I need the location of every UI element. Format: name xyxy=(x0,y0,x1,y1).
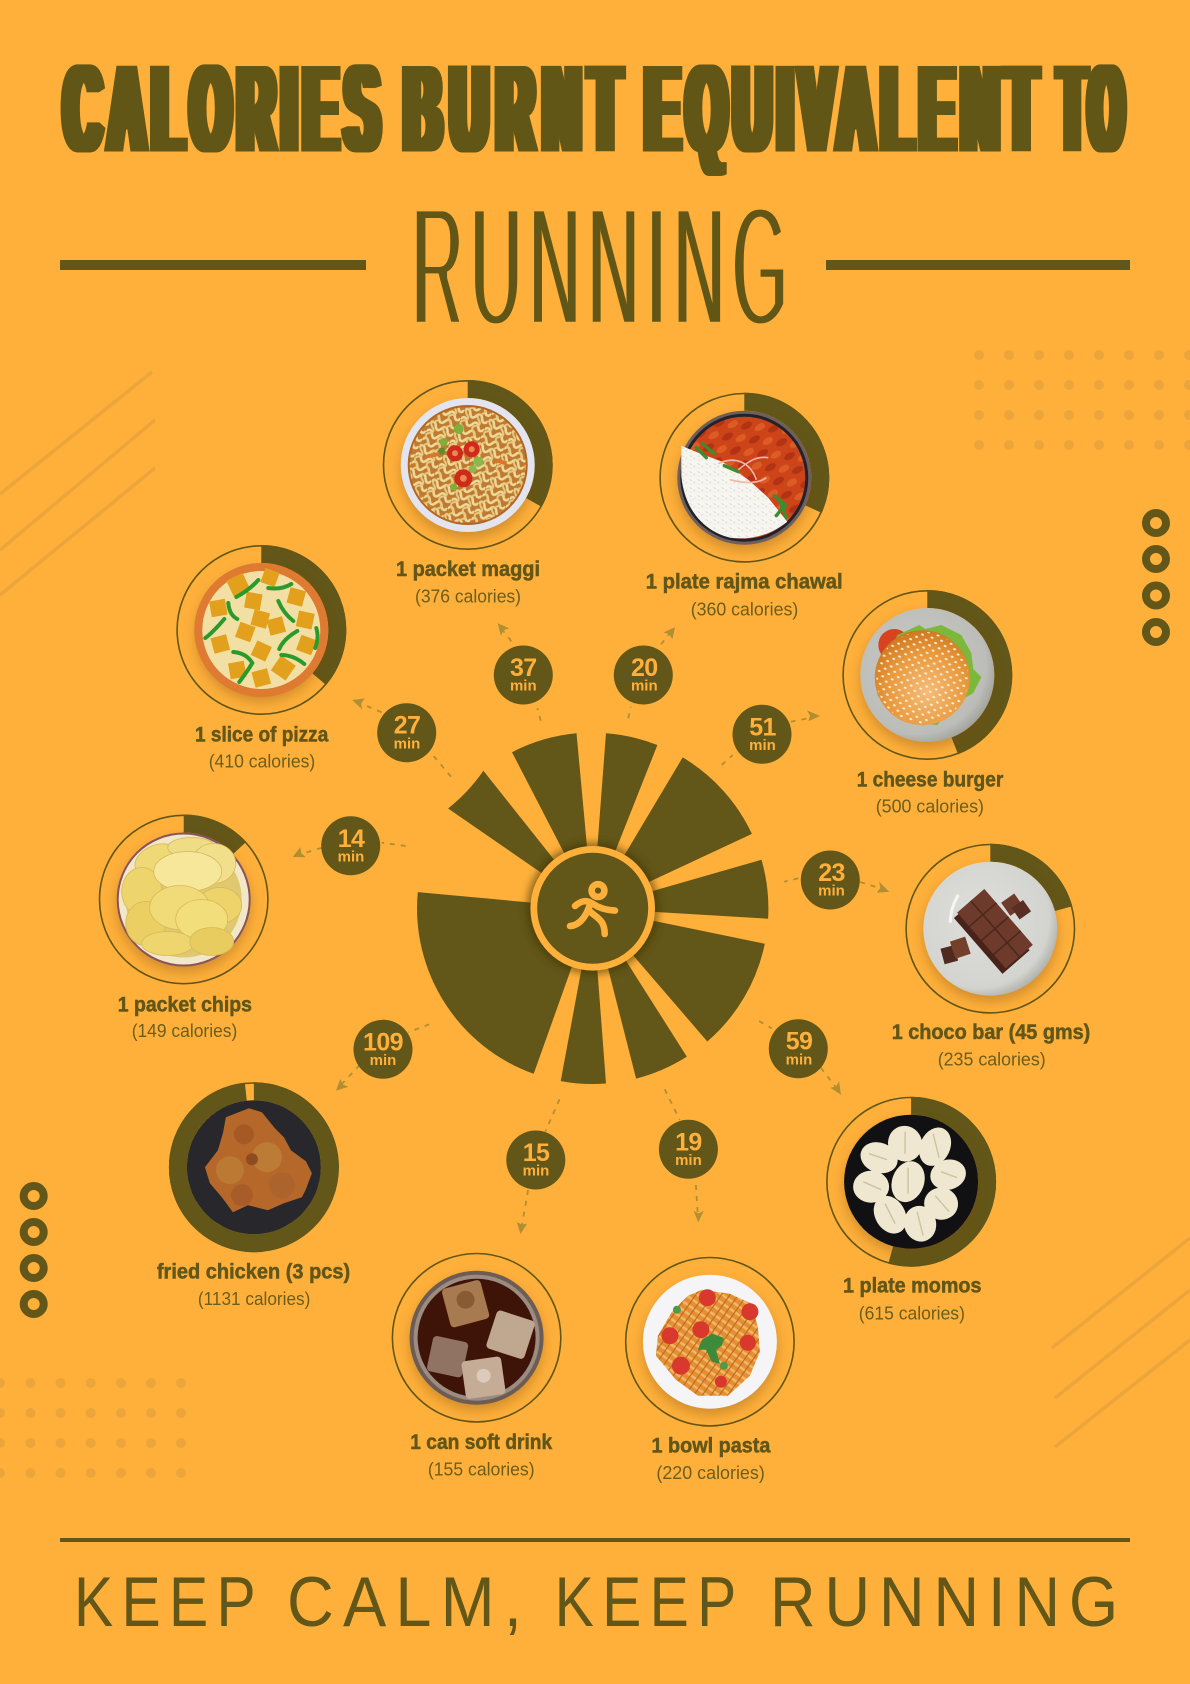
badge: 51 min: min xyxy=(749,737,776,754)
progress ring: rajma chawal xyxy=(660,394,828,562)
badge: 19 min: 19 xyxy=(675,1128,702,1156)
chart sectors xyxy=(417,733,768,1084)
background decorations xyxy=(0,350,1190,1478)
badge: 14 min xyxy=(321,816,380,875)
progress ring: pizza xyxy=(177,546,346,714)
badge: 37 min: 37 xyxy=(510,654,537,682)
image: bowl of chips xyxy=(117,832,251,972)
badge: 109 min: 109 xyxy=(363,1028,403,1056)
progress ring: maggi xyxy=(384,381,552,549)
title: CALORIES xyxy=(64,41,386,179)
label: soft drink xyxy=(410,1431,552,1479)
label: soft drink: 1 can soft drink xyxy=(410,1431,552,1454)
badge: 37 min xyxy=(494,646,553,704)
panel: soft drink xyxy=(392,1254,561,1479)
badge: 15 min: min xyxy=(523,1163,549,1180)
badge: 15 min xyxy=(506,1130,565,1190)
label: cheese burger xyxy=(857,768,1003,816)
progress ring: choco bar xyxy=(906,844,1074,1013)
title: BURNT xyxy=(404,41,630,179)
badge: 23 min: 23 xyxy=(818,859,845,887)
label: pasta: (220 calories) xyxy=(656,1463,765,1483)
progress ring: momos xyxy=(827,1098,995,1266)
label: soft drink: (155 calories) xyxy=(428,1459,535,1479)
label: cheese burger: 1 cheese burger xyxy=(857,768,1003,791)
image: glass with ice xyxy=(410,1271,544,1411)
panel: cheese burger xyxy=(843,591,1012,816)
panel: fried chicken xyxy=(157,1083,350,1309)
panel: choco bar xyxy=(892,844,1090,1070)
badge: 23 min: min xyxy=(818,883,845,900)
image: bowl of pasta xyxy=(643,1275,777,1415)
panel: rajma chawal xyxy=(646,394,843,619)
badge: 20 min: 20 xyxy=(631,654,658,682)
label: momos: 1 plate momos xyxy=(843,1275,982,1298)
image: pizza xyxy=(194,563,328,702)
label: maggi xyxy=(396,558,540,607)
badge: 59 min: 59 xyxy=(786,1028,812,1056)
badge: 59 min xyxy=(769,1019,828,1078)
panel: momos xyxy=(827,1098,995,1323)
badge: 27 min: min xyxy=(394,735,420,752)
badge: 14 min: min xyxy=(338,848,364,866)
badge: 27 min xyxy=(377,703,436,762)
label: momos: (615 calories) xyxy=(859,1303,965,1323)
image: plate of momos xyxy=(844,1115,978,1255)
label: fried chicken: fried chicken (3 pcs) xyxy=(157,1260,350,1283)
label: choco bar xyxy=(892,1021,1090,1070)
badge: 59 min: min xyxy=(786,1051,812,1068)
badge: 19 min: min xyxy=(675,1152,702,1169)
label: rajma chawal: 1 plate rajma chawal xyxy=(646,571,843,594)
label: fried chicken: (1131 calories) xyxy=(198,1289,310,1309)
label: choco bar: 1 choco bar (45 gms) xyxy=(892,1021,1090,1044)
badge: 15 min: 15 xyxy=(523,1139,550,1167)
image: burger on plate xyxy=(860,608,994,748)
label: pizza: (410 calories) xyxy=(209,752,315,772)
footer tagline: RUNNING xyxy=(770,1563,1127,1642)
badge: 109 min: min xyxy=(370,1052,396,1069)
badge: 37 min: min xyxy=(510,678,537,695)
subtitle: running xyxy=(60,172,1130,361)
label: rajma chawal xyxy=(646,571,843,619)
label: pasta xyxy=(652,1434,771,1483)
badge: 27 min: 27 xyxy=(394,712,420,740)
panel: pasta xyxy=(626,1258,794,1483)
progress ring: chips xyxy=(100,815,268,984)
center hub with runner icon xyxy=(527,842,659,974)
badge: 20 min: min xyxy=(631,678,658,695)
image: fried chicken plate xyxy=(187,1100,321,1234)
progress ring: fried chicken xyxy=(170,1083,338,1251)
radial bar chart xyxy=(417,733,768,1084)
label: pasta: 1 bowl pasta xyxy=(652,1434,771,1457)
label: pizza: 1 slice of pizza xyxy=(195,724,329,747)
badge: 51 min xyxy=(732,705,792,764)
label: rajma chawal: (360 calories) xyxy=(691,599,798,619)
progress ring: pasta xyxy=(626,1258,794,1426)
badge: 23 min xyxy=(801,850,860,910)
label: chips: (149 calories) xyxy=(132,1021,237,1041)
footer tagline: KEEP xyxy=(555,1563,745,1642)
label: chips: 1 packet chips xyxy=(118,993,252,1016)
image: chocolate on plate xyxy=(923,862,1057,1002)
panel: pizza xyxy=(177,546,346,772)
image: bowl of noodles xyxy=(401,398,535,538)
label: chips xyxy=(118,993,252,1041)
panel: chips xyxy=(100,815,268,1041)
badge: 20 min xyxy=(614,646,673,704)
badge: 51 min: 51 xyxy=(749,713,776,741)
label: cheese burger: (500 calories) xyxy=(876,796,984,816)
label: pizza xyxy=(195,724,329,772)
label: fried chicken xyxy=(157,1260,350,1309)
dashed arrows xyxy=(293,623,889,1234)
panel: maggi xyxy=(384,381,552,607)
label: momos xyxy=(843,1275,982,1323)
badge: 14 min: 14 xyxy=(338,825,365,853)
badge: 19 min xyxy=(659,1120,718,1179)
footer tagline: CALM, xyxy=(287,1563,531,1642)
badge: 109 min xyxy=(354,1020,412,1079)
progress ring: soft drink xyxy=(392,1254,561,1422)
label: choco bar: (235 calories) xyxy=(938,1050,1046,1070)
label: maggi: (376 calories) xyxy=(415,587,521,607)
footer tagline xyxy=(60,1538,1130,1642)
progress ring: cheese burger xyxy=(843,591,1012,759)
image: rajma chawal plate xyxy=(677,411,811,551)
footer tagline: KEEP xyxy=(74,1563,264,1642)
label: maggi: 1 packet maggi xyxy=(396,558,540,581)
